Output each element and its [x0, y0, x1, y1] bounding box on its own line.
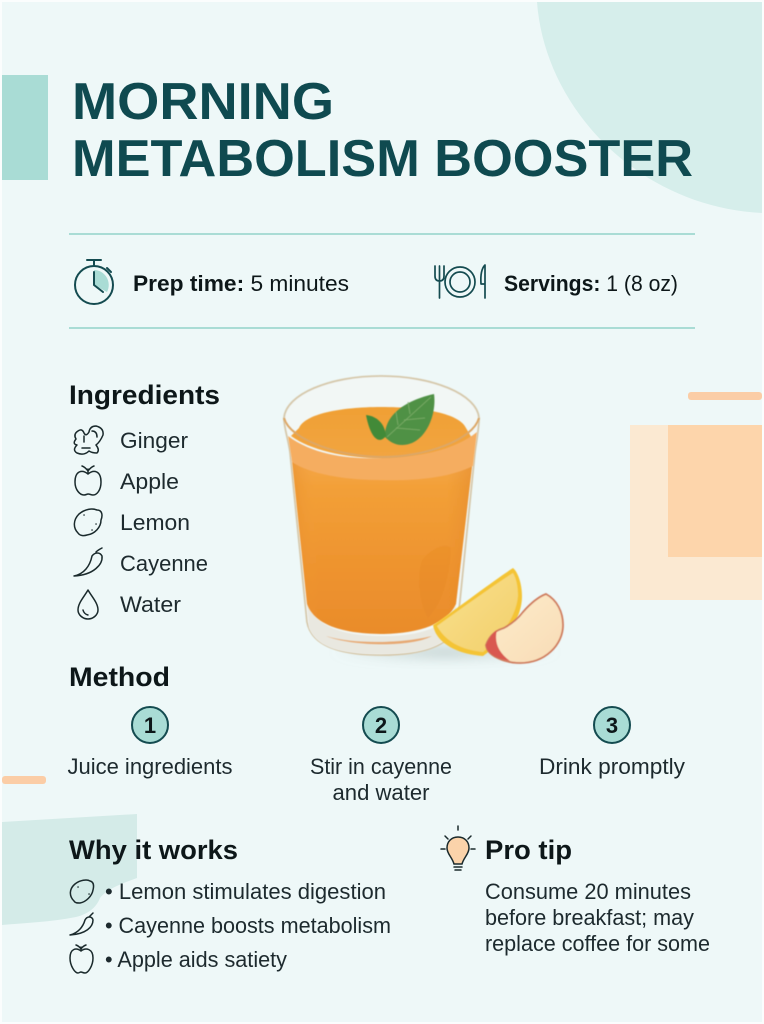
servings text: Servings: 1 (8 oz): [504, 271, 678, 296]
benefit: lemon: • Lemon stimulates digestion: [105, 879, 386, 904]
decorative shape: right peach bar: [688, 392, 762, 400]
heading: pro tip: Pro tip: [485, 835, 572, 865]
ingredient: ginger: Ginger: [120, 428, 188, 453]
title: METABOLISM BOOSTER: [72, 130, 693, 188]
heading: ingredients: Ingredients: [69, 380, 220, 410]
lower reflection: [419, 546, 451, 618]
icon: stopwatch: [75, 260, 113, 304]
step 1: 1: [144, 713, 156, 738]
decorative shape: left teal block: [2, 75, 48, 180]
why it works panel: [69, 835, 391, 973]
icon: apple: [70, 945, 93, 973]
mint leaves: [366, 394, 434, 445]
ingredients panel: [69, 380, 220, 619]
tip text: Consume 20 minutes: [485, 879, 691, 904]
ingredient: cayenne: Cayenne: [120, 551, 208, 576]
icon: lemon: [70, 880, 94, 903]
glass base: [307, 604, 456, 654]
icon: apple: [75, 466, 101, 495]
decorative shape: left peach bar: [2, 776, 46, 784]
title: [72, 73, 693, 188]
step 2: Stir in cayenne: [310, 754, 452, 779]
icon: light bulb: [441, 826, 475, 870]
step 2: and water: [332, 780, 430, 805]
glass rim: [284, 418, 479, 457]
icon: cayenne pepper: [74, 548, 102, 576]
rim band: [288, 432, 477, 480]
method section: [68, 662, 685, 805]
step 1: Juice ingredients: [68, 754, 232, 779]
heading: method: Method: [69, 662, 170, 692]
icon: lemon: [74, 509, 102, 536]
heading: why it works: Why it works: [69, 835, 238, 865]
step 1: [68, 707, 232, 779]
step 2: 2: [375, 713, 387, 738]
tip text: replace coffee for some: [485, 931, 710, 956]
ingredient: apple: Apple: [120, 469, 179, 494]
decorative shape: lower-left teal block: [2, 814, 137, 925]
step 3: Drink promptly: [539, 754, 685, 779]
prep time text: Prep time: 5 minutes: [133, 271, 349, 296]
decorative shape: right peach blocks: [630, 425, 762, 600]
icon: water drop: [78, 590, 98, 619]
decorative shape: top-right teal arc: [537, 2, 762, 213]
lemon wedge: [433, 568, 522, 656]
tip text: before breakfast; may: [485, 905, 694, 930]
icon: ginger: [74, 426, 103, 454]
juice surface: [291, 407, 473, 458]
meta strip: prep time and servings: [69, 234, 695, 328]
step 3: [539, 707, 685, 779]
ingredient: water: Water: [120, 592, 181, 617]
ingredient: lemon: Lemon: [120, 510, 190, 535]
illustration: glass of juice with lemon and apple: [284, 376, 563, 664]
glass body: [284, 376, 479, 655]
pro tip panel: [441, 826, 710, 956]
shadow: [330, 640, 560, 664]
title: MORNING: [72, 73, 334, 131]
step 2: [310, 707, 452, 805]
step 3: 3: [606, 713, 618, 738]
icon: cayenne pepper: [70, 913, 93, 935]
benefit: cayenne: • Cayenne boosts metabolism: [105, 913, 391, 938]
apple slice: [486, 594, 563, 663]
icon: plate and cutlery: [435, 265, 485, 298]
benefit: apple: • Apple aids satiety: [105, 947, 287, 972]
tip text: [485, 879, 710, 956]
juice: [288, 407, 477, 634]
